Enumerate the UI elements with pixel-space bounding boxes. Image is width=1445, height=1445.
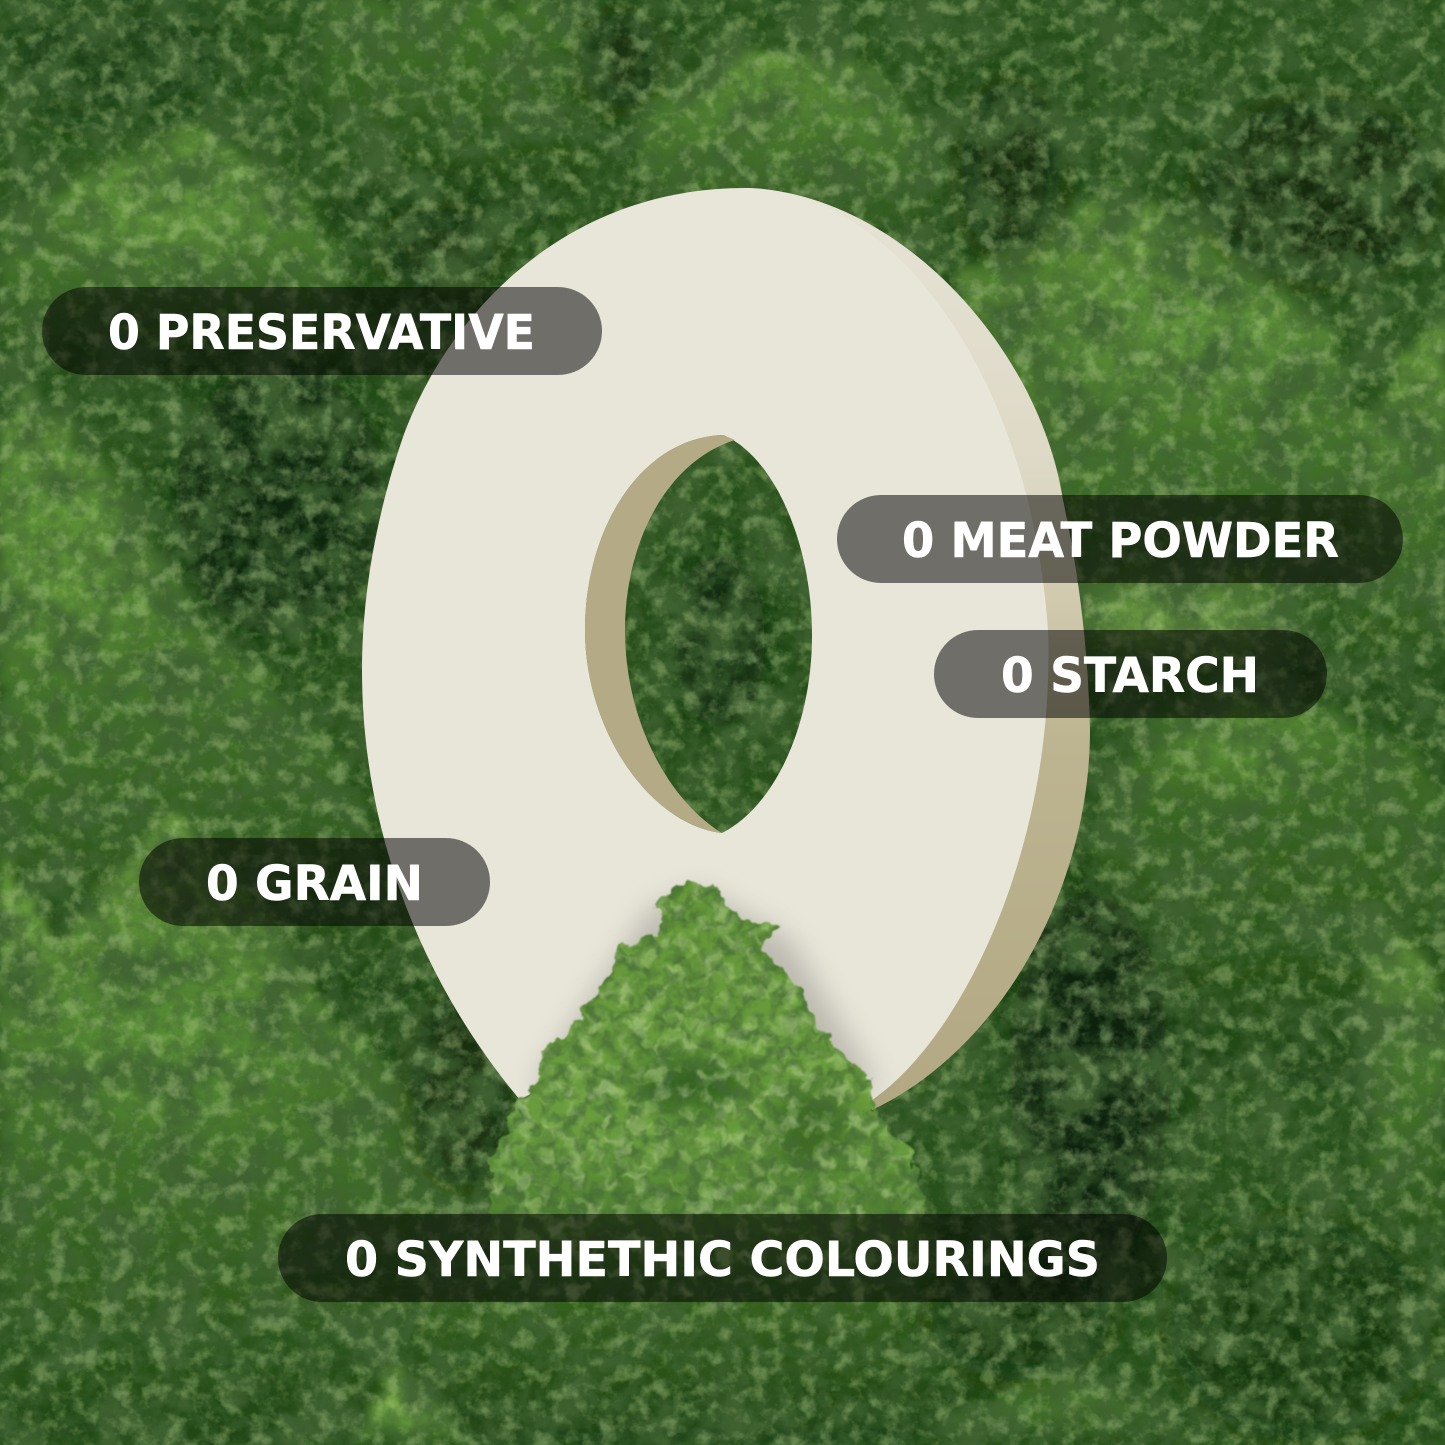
pill: 0 grain (139, 838, 490, 926)
pill: 0 meat powder: 0 MEAT POWDER (902, 513, 1339, 569)
zero front face (362, 188, 1048, 1100)
bright canopy highlights (0, 160, 1330, 1120)
pill: 0 starch (934, 630, 1327, 718)
numeral zero (362, 188, 1090, 1110)
pill: 0 starch: 0 STARCH (1001, 648, 1259, 704)
pill: 0 grain: 0 GRAIN (206, 856, 423, 912)
pill: 0 preservative (42, 287, 602, 375)
pill: 0 preservative: 0 PRESERVATIVE (108, 305, 535, 361)
front tree overlapping zero (470, 870, 940, 1310)
pill: 0 synthethic colourings (278, 1214, 1167, 1302)
pill: 0 synthethic colourings: 0 SYNTHETHIC COLOURINGS (345, 1232, 1100, 1288)
zero inner wall (585, 435, 735, 833)
pill: 0 meat powder (837, 495, 1403, 583)
zero side depth (745, 188, 1090, 1110)
soft shadow of front tree on zero (530, 890, 880, 1090)
